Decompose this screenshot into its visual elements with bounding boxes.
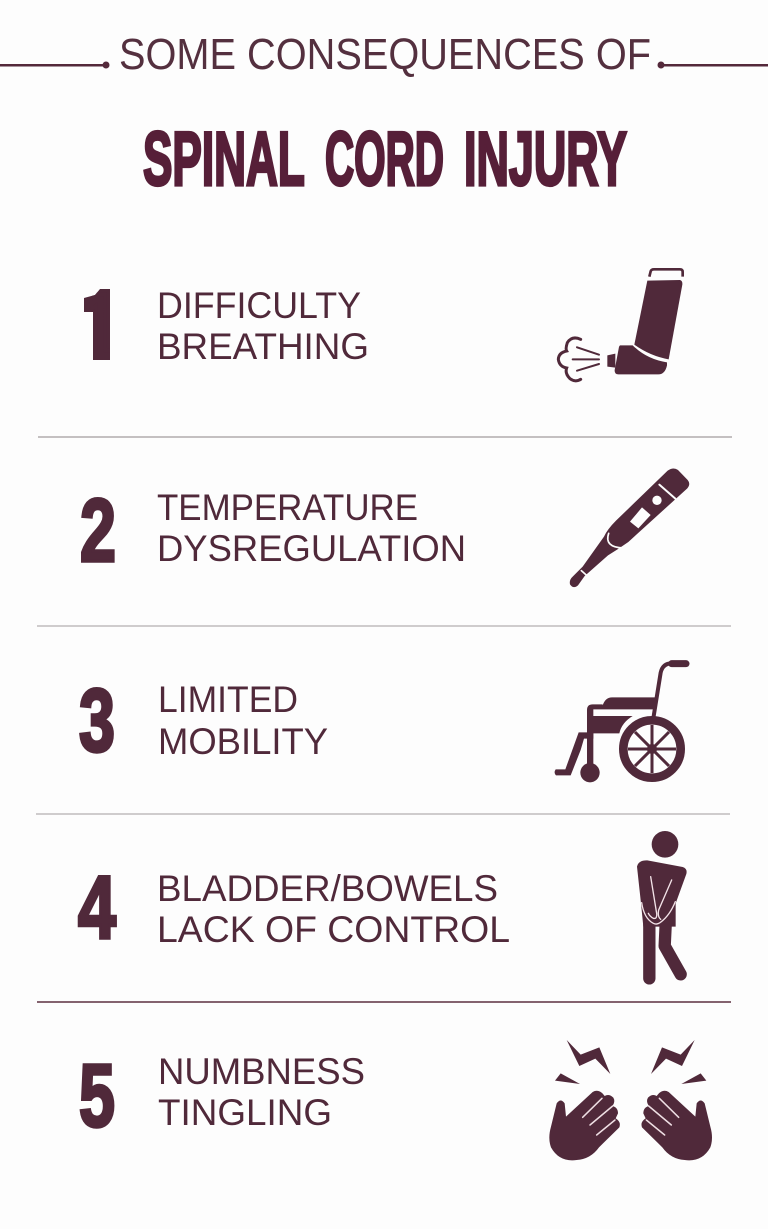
label: limited mobility: MOBILITY — [158, 721, 328, 762]
label: difficulty breathing: DIFFICULTY — [157, 285, 361, 326]
icon: wheelchair — [555, 663, 686, 782]
label: temperature dysregulation: DYSREGULATION — [157, 528, 466, 569]
row 3: limited mobility — [79, 663, 686, 782]
number 4: 4 — [78, 857, 116, 957]
icon: inhaler — [558, 269, 683, 381]
label: limited mobility: LIMITED — [158, 679, 298, 720]
divider 2 — [37, 625, 731, 627]
right hand — [641, 1040, 712, 1160]
left hand — [549, 1040, 620, 1160]
number 1: 1 — [80, 274, 118, 381]
divider 4 — [37, 1001, 731, 1003]
icon: tingling hands — [549, 1040, 712, 1160]
row 4: bladder/bowels lack of control — [78, 831, 687, 978]
number 1 — [84, 289, 110, 360]
header rule: left — [0, 62, 110, 68]
row 2: temperature dysregulation — [80, 468, 689, 587]
title: CORD — [325, 117, 444, 202]
number 3: 3 — [79, 670, 115, 770]
divider 1 — [38, 436, 732, 438]
icon: thermometer — [570, 468, 689, 587]
title: INJURY — [464, 117, 627, 202]
label: difficulty breathing: BREATHING — [157, 326, 369, 367]
icon: person holding bladder — [637, 831, 687, 978]
label: numbness tingling: NUMBNESS — [158, 1051, 365, 1092]
label: bladder/bowels lack of control: LACK OF CONTROL — [157, 909, 510, 950]
label: bladder/bowels lack of control: BLADDER/BOWELS — [157, 868, 498, 909]
label: numbness tingling: TINGLING — [158, 1092, 332, 1133]
number 5: 5 — [79, 1045, 115, 1145]
divider 3 — [36, 813, 730, 815]
header rule: right — [658, 62, 768, 68]
label: temperature dysregulation: TEMPERATURE — [157, 487, 418, 528]
row 5: numbness tingling — [79, 1040, 712, 1160]
number 2: 2 — [80, 480, 116, 580]
subtitle: SOME CONSEQUENCES OF — [119, 30, 651, 79]
row 1: difficulty breathing — [80, 269, 683, 381]
title: SPINAL — [143, 117, 304, 202]
